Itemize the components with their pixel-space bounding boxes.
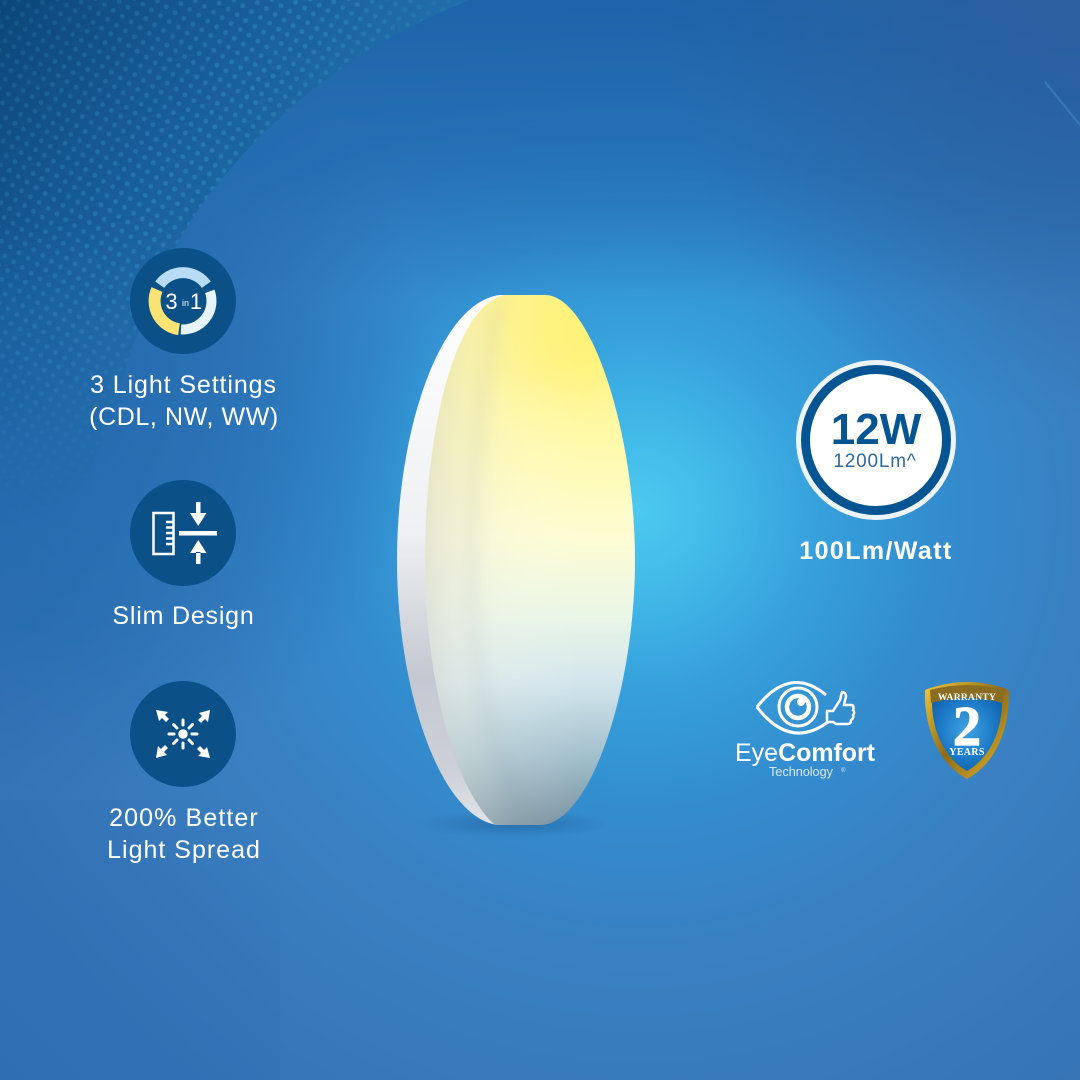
- warranty shield: 2: [953, 696, 981, 758]
- warranty shield: [925, 682, 1009, 779]
- warranty shield: YEARS: [949, 747, 985, 758]
- label: light spread: Light Spread: [107, 836, 261, 864]
- lamp: [397, 295, 635, 838]
- label: 200% better: 200% Better: [109, 804, 259, 832]
- icon: 3 in 1 light settings: 1: [190, 289, 202, 314]
- label: CDL NW WW: (CDL, NW, WW): [89, 403, 279, 431]
- label: 3 light settings: 3 Light Settings: [90, 371, 277, 399]
- logo: EyeComfort: ®: [841, 767, 846, 774]
- warranty shield: WARRANTY: [938, 693, 996, 703]
- logo: EyeComfort: Technology: [769, 764, 833, 779]
- icon: 3 in 1 light settings: in: [182, 298, 189, 308]
- logo: EyeComfort: EyeComfort: [735, 739, 876, 767]
- icon: slim design: [130, 480, 236, 586]
- badge: 12W 1200Lm: 12W: [831, 405, 922, 454]
- icon: light spread: [130, 681, 236, 787]
- label: 100Lm/Watt: 100Lm/Watt: [799, 537, 953, 565]
- label: slim design: Slim Design: [112, 602, 255, 630]
- icon: 3 in 1 light settings: [130, 248, 236, 354]
- logo: EyeComfort: [735, 682, 876, 779]
- badge: 12W 1200Lm: [798, 362, 954, 518]
- icon: 3 in 1 light settings: 3: [165, 289, 178, 314]
- badge: 12W 1200Lm: 1200Lm^: [833, 451, 917, 472]
